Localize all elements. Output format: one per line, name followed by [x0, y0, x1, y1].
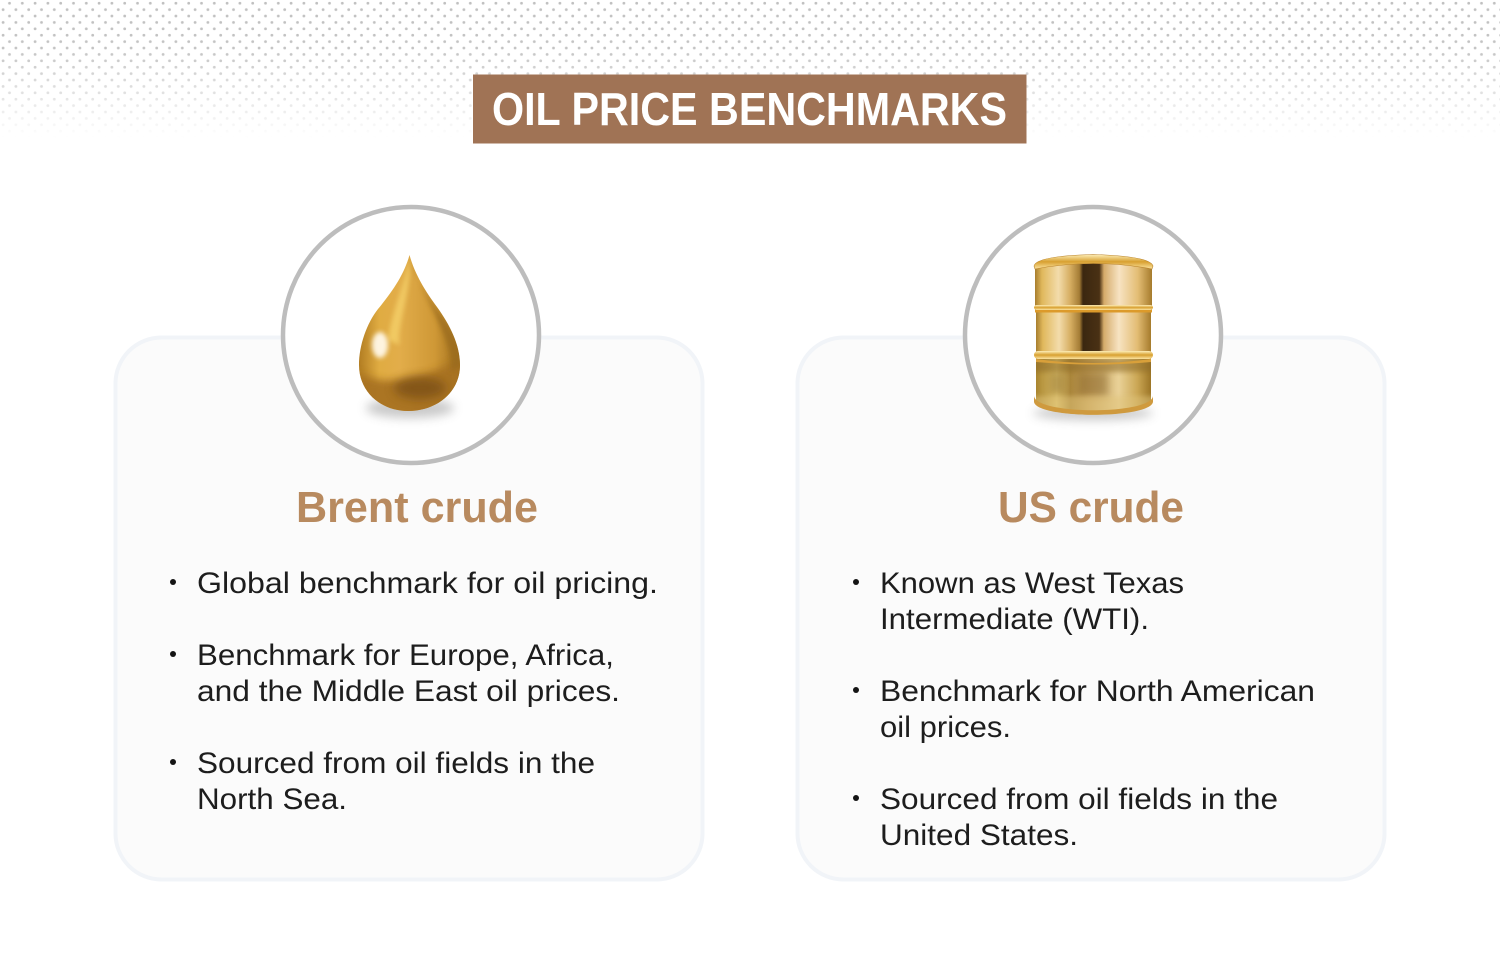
- panel: Brent crude: [116, 207, 702, 880]
- panel background: US: [798, 338, 1384, 880]
- title: [473, 74, 1026, 144]
- panel background: Brent: [116, 338, 702, 880]
- heading: US crude: US crude: [998, 483, 1184, 532]
- bullet list: US: Benchmark for North American: [880, 675, 1315, 708]
- bullet list: US: Sourced from oil fields in the: [880, 783, 1278, 816]
- bullet list: US: oil prices.: [880, 711, 1011, 744]
- bullet list: US: [853, 567, 1315, 852]
- bullet list: Brent: Sourced from oil fields in the: [197, 747, 595, 780]
- bullet list: US: Intermediate (WTI).: [880, 603, 1149, 636]
- bullet list: Brent: North Sea.: [197, 783, 347, 816]
- icon: oil barrel: [965, 207, 1221, 463]
- title: OIL PRICE BENCHMARKS: [492, 83, 1007, 135]
- background dot pattern: [2, 2, 1500, 126]
- heading: Brent crude: Brent crude: [296, 483, 538, 532]
- icon: oil drop: [283, 207, 539, 463]
- bullet list: Brent: [170, 567, 658, 816]
- panel: US crude: [798, 207, 1384, 880]
- bullet list: Brent: and the Middle East oil prices.: [197, 675, 620, 708]
- bullet list: US: Known as West Texas: [880, 567, 1184, 600]
- bullet list: US: United States.: [880, 819, 1078, 852]
- bullet list: Brent: Benchmark for Europe, Africa,: [197, 639, 614, 672]
- bullet list: Brent: Global benchmark for oil pricing.: [197, 567, 658, 600]
